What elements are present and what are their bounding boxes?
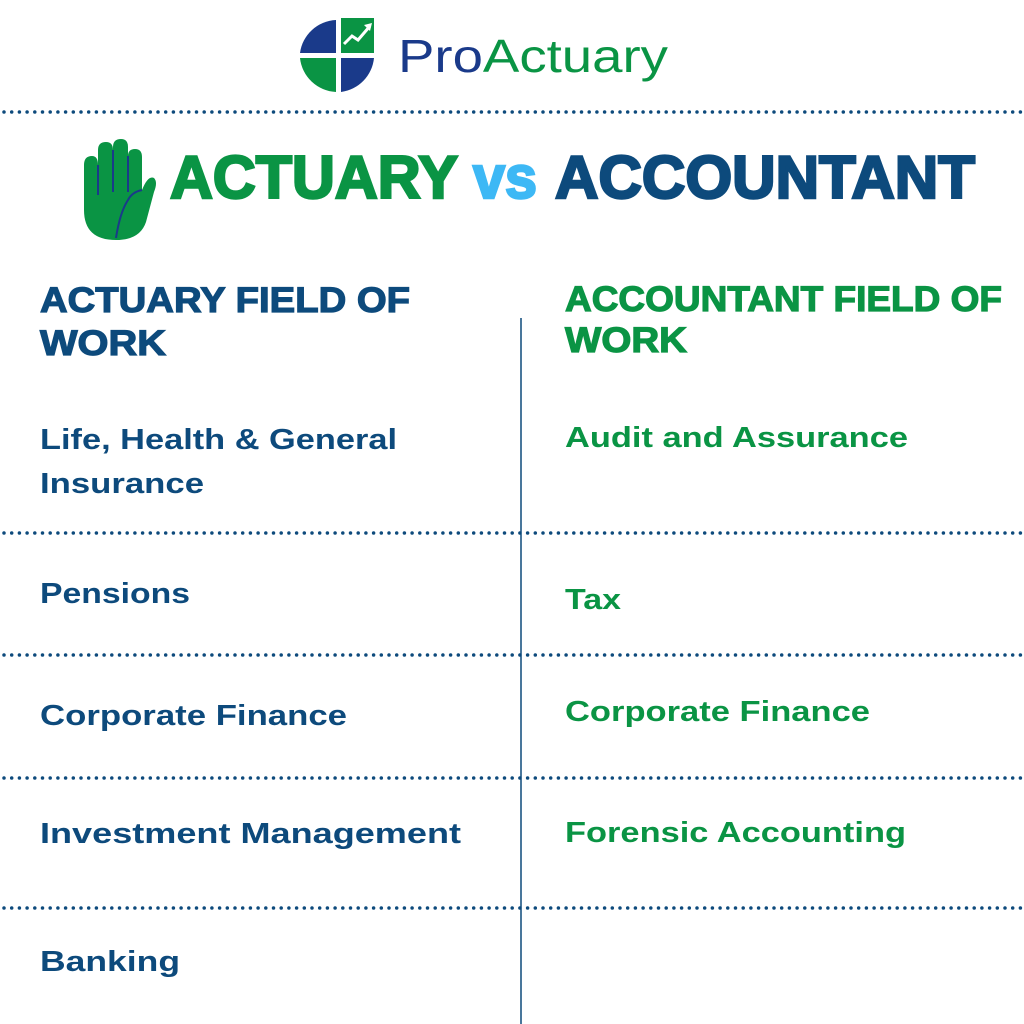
heading: actuary field of work: WORK (40, 324, 166, 363)
list: actuary fields: Corporate Finance (40, 700, 347, 732)
list: actuary fields: Life, Health & General (40, 424, 397, 456)
icon: logo mark (300, 18, 374, 92)
heading: accountant field of work (565, 280, 1002, 360)
title: ACCOUNTANT (555, 144, 975, 211)
list: accountant fields (565, 422, 908, 849)
title: ACTUARY (170, 144, 458, 211)
icon: hand (84, 139, 156, 240)
list: actuary fields: Banking (40, 946, 180, 978)
title: vs (473, 144, 537, 211)
list: actuary fields: Insurance (40, 468, 204, 500)
list: accountant fields: Audit and Assurance (565, 422, 908, 454)
list: actuary fields (40, 424, 461, 978)
heading: actuary field of work: ACTUARY FIELD OF (40, 281, 410, 320)
title (170, 144, 975, 211)
list: actuary fields: Pensions (40, 578, 190, 610)
logo text: Pro Actuary (398, 30, 668, 82)
list: actuary fields: Investment Management (40, 818, 461, 850)
heading: accountant field of work: WORK (565, 321, 687, 360)
list: accountant fields: Tax (565, 584, 621, 616)
logo (300, 18, 668, 92)
heading: actuary field of work (40, 281, 410, 363)
list: accountant fields: Corporate Finance (565, 696, 870, 728)
heading: accountant field of work: ACCOUNTANT FIELD OF (565, 280, 1002, 319)
list: accountant fields: Forensic Accounting (565, 817, 906, 849)
